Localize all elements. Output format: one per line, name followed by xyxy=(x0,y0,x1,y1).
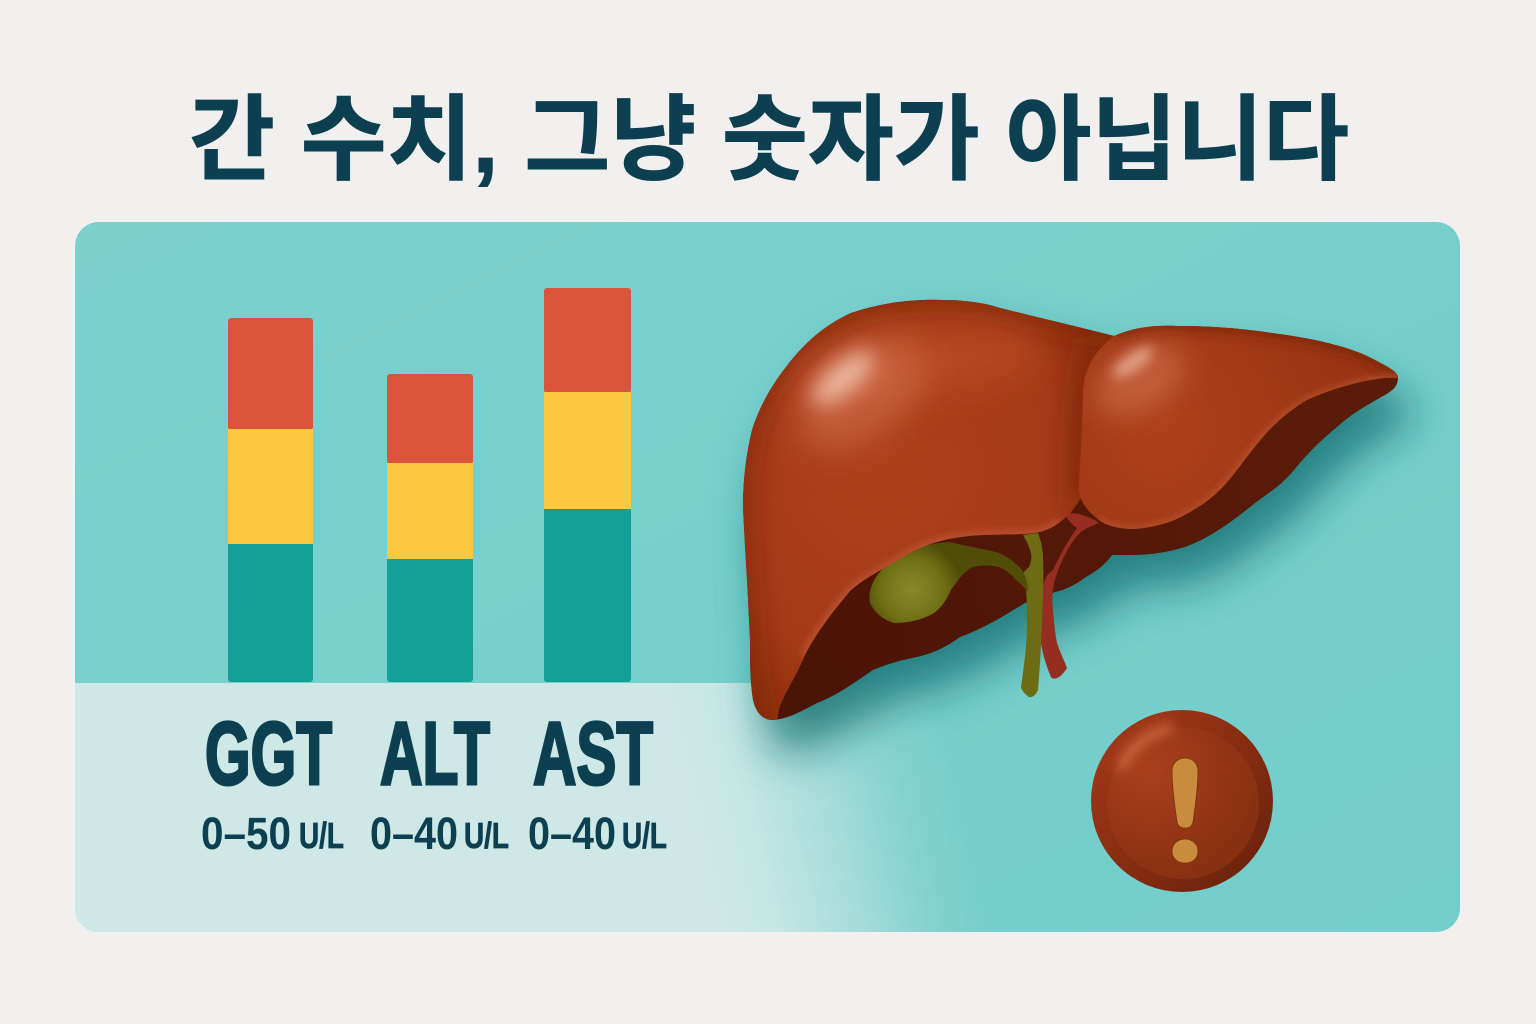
label: AST: AST xyxy=(533,703,653,803)
range: ALT 0–40 U/L: U/L xyxy=(464,815,509,856)
bar: GGT xyxy=(228,318,313,682)
bar: AST xyxy=(544,288,631,682)
bile duct xyxy=(1020,533,1043,697)
panel: light label band xyxy=(75,683,1025,932)
range: AST 0–40 U/L: 0–40 xyxy=(528,808,616,859)
gallbladder xyxy=(869,542,1028,623)
bar: ALT xyxy=(387,374,473,682)
badge highlight xyxy=(1120,727,1172,770)
title: 간 수치, 그냥 숫자가 아닙니다 xyxy=(189,88,1349,192)
label: ALT: ALT xyxy=(380,703,490,803)
badge disc xyxy=(1091,710,1273,892)
liver underside xyxy=(743,300,1398,720)
liver right lobe xyxy=(1070,320,1405,535)
panel: main teal card xyxy=(75,222,1460,932)
liver main lobe xyxy=(743,300,1114,720)
icon: exclamation mark xyxy=(1172,758,1198,863)
range: ALT 0–40 U/L: 0–40 xyxy=(370,808,458,859)
range: GGT 0–50 U/L: U/L xyxy=(299,815,344,856)
label: GGT: GGT xyxy=(205,703,332,803)
badge inner disc xyxy=(1107,727,1259,879)
range: AST 0–40 U/L: U/L xyxy=(622,815,667,856)
range: GGT 0–50 U/L: 0–50 xyxy=(201,808,291,859)
icon: warning badge xyxy=(1091,710,1273,892)
artery xyxy=(1041,513,1099,679)
liver shadow xyxy=(759,332,1414,752)
icon: liver xyxy=(730,290,1405,735)
bar chart: liver enzyme levels xyxy=(228,288,631,682)
